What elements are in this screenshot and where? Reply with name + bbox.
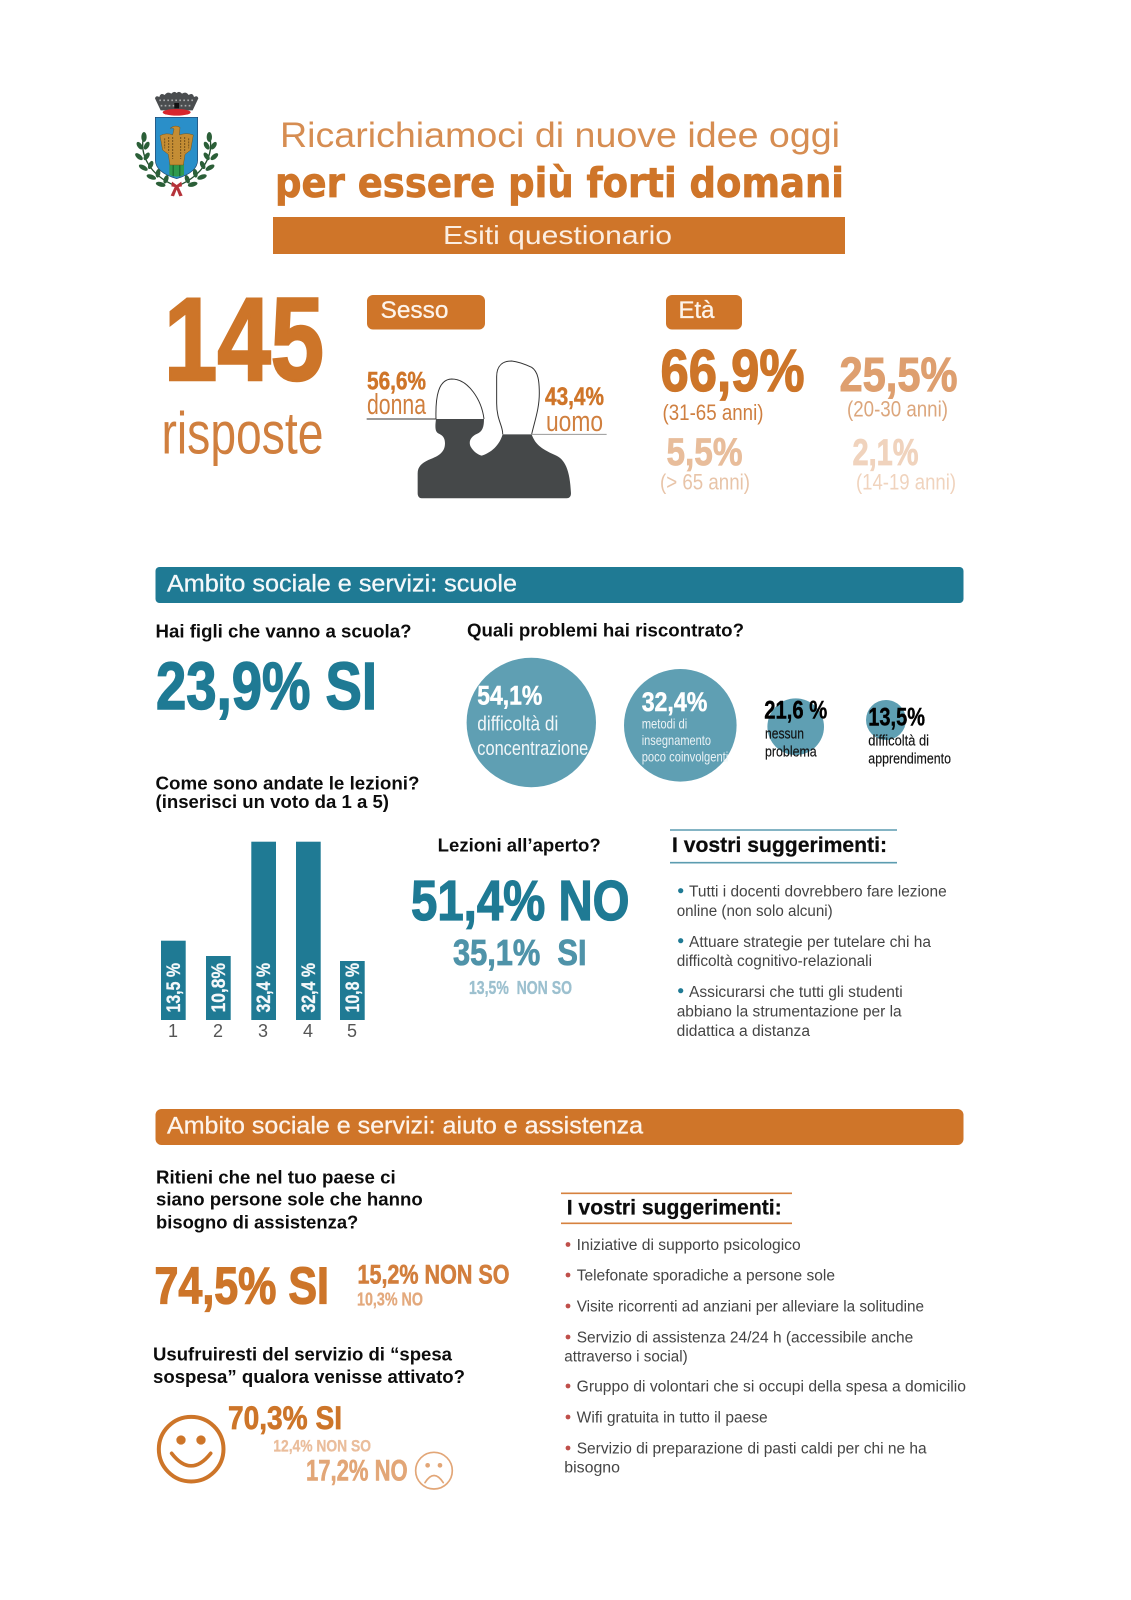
bar 4: 32,4 % [299,963,320,1012]
age 20-30 [840,349,958,422]
crown [155,92,198,116]
sesso badge: Sesso [380,297,448,324]
bar 1: 1 [168,1021,178,1041]
bubble 54,1%: difficoltà di [477,714,558,736]
stat no: 51,4% NO [411,869,630,933]
bubble 13,5% [866,700,951,767]
bar 3: 32,4 % [254,963,275,1012]
bubble 54,1%: concentrazione [477,738,588,760]
age 14-19 [852,432,956,494]
age over 65: (> 65 anni) [660,470,750,494]
bar 5 [340,961,365,1041]
age 20-30: (20-30 anni) [847,396,948,422]
suggestion 6: Wifi gratuita in tutto il paese [577,1410,768,1427]
suggestion 1: Tutti i docenti dovrebbero fare lezione [689,884,947,901]
question: spesa sospesa [153,1344,465,1387]
shield [155,117,198,179]
bubble 54,1% [467,658,596,787]
panel: età [660,295,958,494]
age 31-65: (31-65 anni) [662,400,764,425]
question: persone sole: Ritieni che nel tuo paese ci [156,1166,396,1187]
icon: smiley [159,1417,223,1481]
suggestion 3: abbiano la strumentazione per la [677,1004,902,1021]
question: persone sole: siano persone sole che hanno [156,1188,423,1209]
uomo percentage: 43,4% [545,383,604,411]
heading aperto: Lezioni all’aperto? [438,835,601,856]
suggestion 7: Servizio di preparazione di pasti caldi per chi ne ha [577,1440,927,1457]
bubble 21,6%: 21,6 % [764,696,827,724]
bar chart: voti lezioni [161,842,365,1041]
question: persone sole [156,1166,423,1232]
stat non so: 15,2% NON SO [358,1259,510,1289]
panel: suggerimenti assistenza [561,1193,966,1477]
bar 5: 10,8 % [343,963,364,1012]
section header: aiuto e assistenza [156,1109,964,1145]
bubble 32,4% [624,669,737,782]
icon: sad face [416,1452,452,1489]
question: lezioni: (inserisci un voto da 1 a 5) [156,791,389,812]
ribbon [171,182,183,196]
suggestion 7 [564,1440,927,1477]
age 20-30: 25,5% [840,349,958,402]
question: figli a scuola [156,620,412,724]
suggestion 3: didattica a distanza [677,1023,810,1040]
età badge [666,295,742,330]
sesso badge [367,295,485,330]
age 31-65: 66,9% [660,338,804,404]
bar 4 [296,842,321,1041]
bar 2 [206,956,231,1041]
age over 65: 5,5% [666,431,742,474]
bubble 32,4%: insegnamento [642,732,711,748]
suggestion 1: Iniziative di supporto psicologico [577,1237,801,1254]
heading problemi: Quali problemi hai riscontrato? [467,620,744,640]
suggestion 3 [677,984,903,1040]
bubble 21,6% [764,696,827,761]
suggestion 1: online (non solo alcuni) [677,903,833,920]
title line 1: Ricarichiamoci di nuove idee oggi [280,116,840,155]
stat si: 35,1% SI [453,932,586,973]
stat non so: 13,5% NON SO [469,977,572,998]
bubble 32,4%: metodi di [642,715,687,731]
donna percentage: 56,6% [367,368,426,396]
question: spesa sospesa: Usufruiresti del servizio di “spesa [153,1344,453,1365]
age 31-65 [660,338,804,425]
question: lezioni [156,772,420,812]
section header: aiuto e assistenza: Ambito sociale e servizi: aiuto e assistenza [167,1112,644,1140]
question: figli a scuola: Hai figli che vanno a scuola? [156,620,412,642]
silhouette chart [367,361,607,498]
bar 5: 5 [347,1021,357,1041]
suggestion 3: Visite ricorrenti ad anziani per alleviare la solitudine [577,1298,924,1315]
heading suggerimenti: I vostri suggerimenti: [672,833,887,857]
stat no: 10,3% NO [357,1290,423,1310]
età badge: Età [678,297,715,324]
panel: lezioni all'aperto [411,835,630,998]
title [273,116,845,254]
donna percentage: donna [367,389,427,421]
subtitle banner [273,217,845,254]
suggestion 4: Servizio di assistenza 24/24 h (accessibile anche [577,1329,913,1346]
uomo percentage [545,383,604,438]
panel: spesa sospesa stats [159,1400,452,1489]
suggestion 1 [677,884,947,920]
panel: suggerimenti scuole [670,830,947,1040]
bar 4: 4 [303,1021,313,1041]
total responses [162,274,324,466]
heading suggerimenti: I vostri suggerimenti: [567,1195,782,1219]
bubble 13,5%: difficoltà di [868,733,929,750]
donna percentage [367,368,427,421]
suggestion 5: Gruppo di volontari che si occupi della spesa a domicilio [577,1379,966,1396]
bubble 21,6%: nessun [765,725,804,742]
question: persone sole: bisogno di assistenza? [156,1211,358,1232]
bubble 54,1%: 54,1% [477,680,542,710]
question: lezioni: Come sono andate le lezioni? [156,772,420,794]
stat 23,9%: 23,9% SI [156,649,377,724]
suggestion 4 [564,1329,913,1366]
suggestion 4: attraverso i social) [564,1349,688,1366]
risposte label: risposte [162,400,324,466]
age 14-19: 2,1% [852,432,918,473]
title line 2: per essere più forti domani [275,159,844,207]
stat non so: 12,4% NON SO [273,1437,371,1456]
total responses: 145 [164,274,324,406]
question: spesa sospesa: sospesa” qualora venisse attivato? [153,1366,465,1387]
bar 3: 3 [258,1021,268,1041]
bar 1: 13,5 % [164,963,185,1012]
stat si: 70,3% SI [228,1400,342,1436]
icon: municipal coat of arms [134,92,219,196]
subtitle banner: Esiti questionario [443,220,672,250]
section header: scuole: Ambito sociale e servizi: scuole [167,570,517,598]
stat no: 17,2% NO [306,1455,408,1488]
wreath left [134,132,175,188]
panel: sesso [367,295,607,498]
bar 2: 10,8% [209,963,230,1012]
bar 2: 2 [213,1021,223,1041]
suggestion 7: bisogno [564,1460,620,1477]
suggestion 2: Telefonate sporadiche a persone sole [577,1268,835,1285]
stats: persone sole [154,1257,510,1315]
suggestion 2 [677,934,931,970]
bubble 21,6%: problema [765,744,817,761]
age over 65 [660,431,750,494]
suggestion 2: difficoltà cognitivo-relazionali [677,953,872,970]
age 14-19: (14-19 anni) [856,470,956,494]
wreath right [178,132,219,188]
bubble 13,5%: apprendimento [868,750,951,767]
stat si: 74,5% SI [154,1257,329,1315]
uomo percentage: uomo [546,406,603,438]
bar 3 [251,842,276,1041]
bubble 32,4%: poco coinvolgenti [642,749,728,765]
panel: problemi riscontrati [467,620,951,787]
section header: scuole [156,567,964,603]
bubble 13,5%: 13,5% [868,704,925,732]
bar 1 [161,941,186,1041]
bubble 32,4%: 32,4% [642,687,707,717]
suggestion 2: Attuare strategie per tutelare chi ha [689,934,931,951]
suggestion 3: Assicurarsi che tutti gli studenti [689,984,903,1001]
